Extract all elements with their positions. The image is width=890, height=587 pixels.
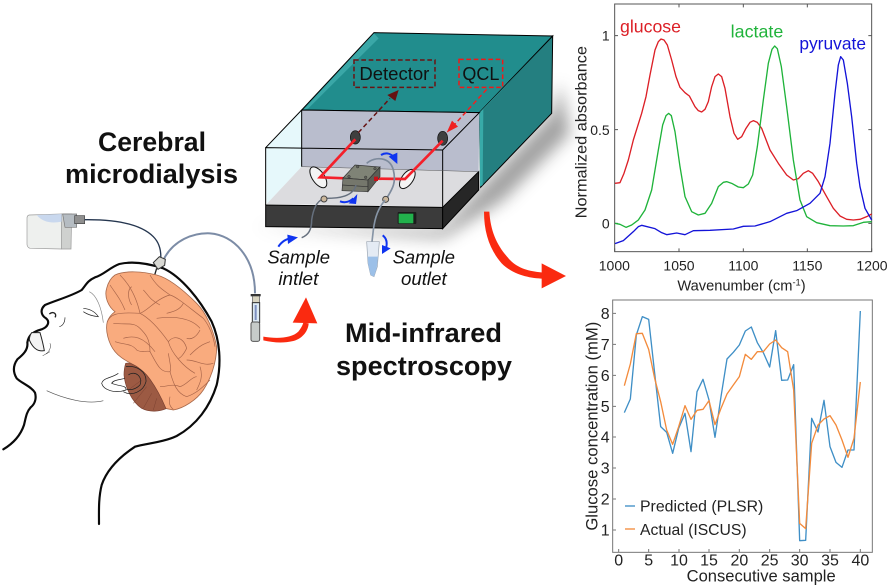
catheter connector [153, 257, 165, 269]
cerebellum [124, 363, 166, 411]
top of housing [302, 33, 553, 113]
outlet tube to vial [372, 200, 385, 242]
y axis ticks: 8 [601, 306, 610, 323]
x axis ticks: 15 [700, 552, 718, 569]
chart: normalized absorbance spectra [574, 4, 888, 295]
x axis ticks: 30 [791, 552, 809, 569]
side of housing [479, 36, 553, 187]
legend: Predicted (PLSR) [640, 498, 763, 515]
floor [267, 167, 479, 207]
lactate spectrum [615, 46, 872, 227]
y axis title: Normalized absorbance [574, 46, 591, 218]
y axis ticks: 5 [601, 399, 610, 416]
y axis ticks: 0 [602, 215, 610, 231]
flow arrows [278, 153, 395, 248]
cerebrum [106, 272, 217, 410]
y axis ticks: 1 [602, 28, 610, 44]
glucose spectrum [615, 39, 872, 220]
chart: glucose concentration over samples [582, 300, 872, 586]
y axis ticks [590, 28, 610, 231]
x axis ticks: 1150 [792, 258, 823, 274]
base side [443, 172, 479, 229]
fittings [321, 196, 389, 202]
flow cell [342, 165, 380, 192]
power switch [398, 212, 416, 224]
y axis ticks: 6 [601, 368, 610, 385]
plot frame [615, 4, 872, 252]
x axis title: Consecutive sample [687, 567, 836, 586]
heading: cerebral microdialysis [65, 127, 238, 189]
x axis ticks: 20 [730, 552, 748, 569]
drop shadow [255, 83, 570, 238]
predicted series [624, 311, 860, 541]
y axis ticks: 2 [601, 492, 610, 509]
heading: mid-infrared spectroscopy [336, 318, 512, 381]
laser beam [320, 139, 443, 179]
x axis ticks: 35 [821, 552, 839, 569]
vial [367, 242, 379, 277]
x axis ticks: 10 [670, 552, 688, 569]
mirror right [396, 167, 418, 191]
heading: cerebral microdialysis: microdialysis [65, 159, 238, 189]
x axis ticks: 25 [761, 552, 779, 569]
glass edges [266, 110, 479, 207]
x axis title: Wavenumber (cm [677, 279, 792, 295]
QCL label [459, 59, 503, 87]
actual series [624, 333, 860, 529]
detector port [350, 131, 360, 144]
x axis ticks: 0 [614, 552, 623, 569]
x axis ticks [614, 552, 869, 569]
y axis ticks: 3 [601, 461, 610, 478]
sample outlet label [393, 246, 455, 289]
y axis ticks: 1 [601, 523, 610, 540]
illustration: patient head with brain and microdialysis catheter [3, 214, 317, 524]
x axis ticks: 1100 [728, 258, 759, 274]
sample outlet label: Sample [393, 246, 455, 267]
collection vial [251, 294, 261, 341]
heading: mid-infrared spectroscopy: Mid-infrared [345, 318, 502, 348]
y axis ticks: 4 [601, 430, 610, 447]
legend: Actual (ISCUS) [640, 522, 747, 539]
chart: normalized absorbance spectra: pyruvate [799, 33, 866, 53]
x axis ticks: 1200 [856, 258, 888, 274]
x axis title: ) [801, 279, 806, 295]
y axis title: Glucose concentration (mM) [582, 322, 601, 531]
heading: mid-infrared spectroscopy: spectroscopy [336, 351, 512, 381]
curve labels: glucose [620, 16, 681, 36]
y axis ticks [601, 306, 610, 540]
x axis ticks: 40 [851, 552, 869, 569]
outlet tube [163, 233, 255, 293]
back wall [302, 110, 479, 172]
sample inlet label: intlet [278, 268, 319, 289]
left wall [266, 110, 302, 204]
pyruvate spectrum [615, 57, 872, 244]
y axis ticks: 7 [601, 337, 610, 354]
x axis ticks: 1000 [599, 258, 630, 274]
chart: normalized absorbance spectra: lactate [731, 22, 784, 42]
x axis ticks: 1050 [663, 258, 695, 274]
beam from QCL [455, 89, 487, 124]
x axis ticks [599, 258, 888, 274]
illustration: spectrometer device [255, 33, 570, 289]
outlet capillary [367, 159, 394, 198]
plot frame [613, 300, 872, 552]
inlet capillary [302, 185, 356, 238]
detector label: Detector [359, 63, 429, 84]
ear [102, 366, 146, 394]
catheter needle [145, 268, 157, 303]
heading: cerebral microdialysis: Cerebral [98, 127, 206, 157]
perfusion fluid bag [27, 214, 85, 249]
inlet tube [85, 220, 161, 260]
head outline [3, 263, 219, 524]
QCL label: QCL [462, 63, 499, 84]
mirror left [307, 164, 330, 191]
arrow: spectrometer to charts [484, 212, 566, 288]
beam to detector [358, 98, 390, 133]
x axis title: -1 [792, 278, 801, 288]
sample inlet label [267, 246, 330, 289]
x axis ticks: 5 [644, 552, 653, 569]
sample inlet label: Sample [267, 246, 330, 267]
y axis ticks: 0.5 [590, 122, 610, 138]
facial features [29, 292, 103, 402]
arrow: brain to spectrometer [263, 297, 317, 342]
base front [266, 205, 443, 229]
legend [625, 498, 763, 539]
sample outlet label: outlet [401, 268, 448, 289]
detector label [354, 60, 435, 87]
QCL port [438, 131, 448, 145]
